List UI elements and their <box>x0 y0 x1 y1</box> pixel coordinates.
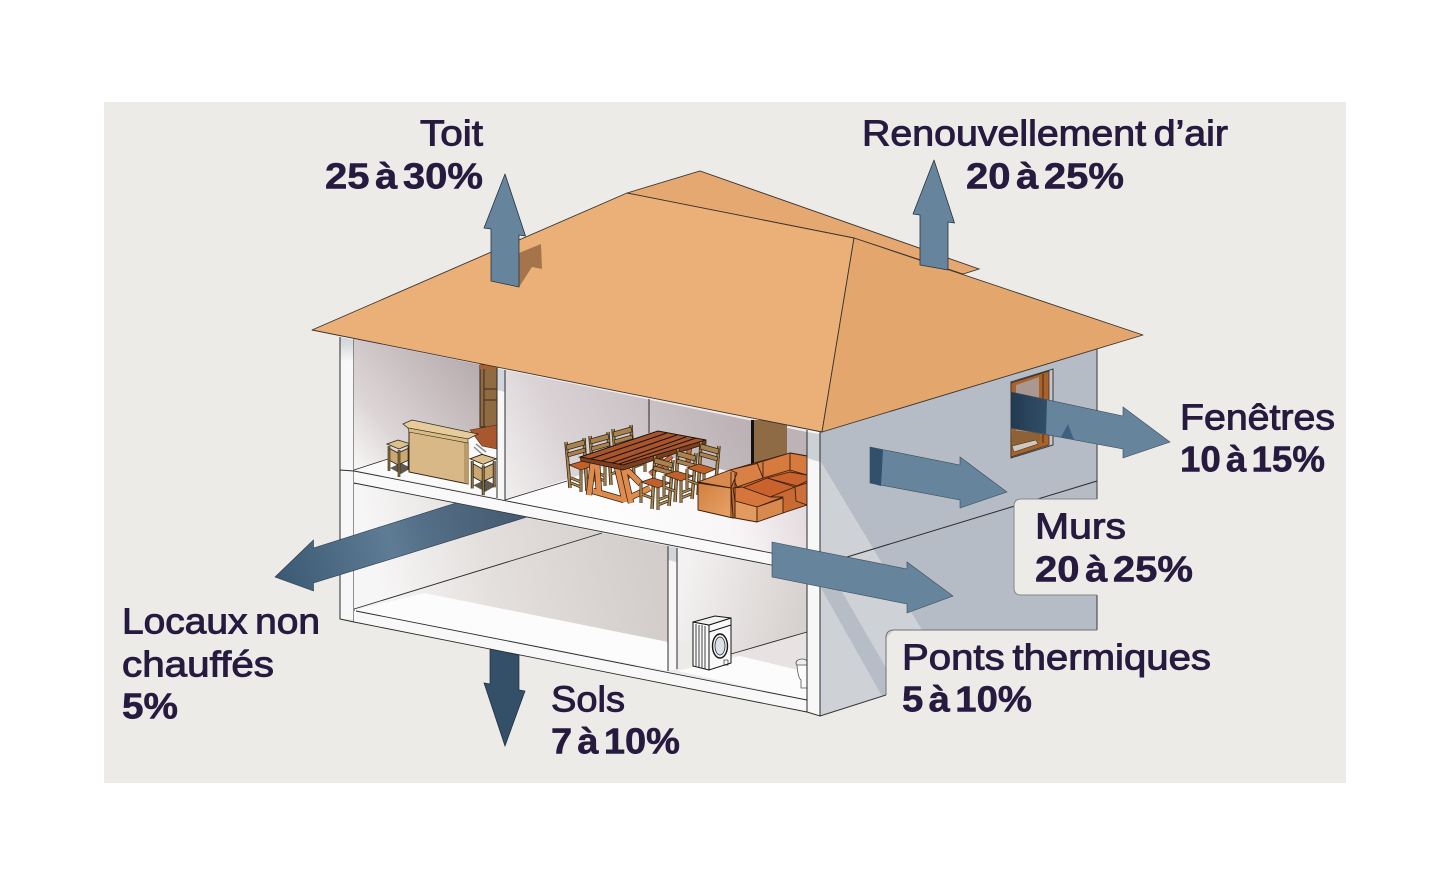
upper left room <box>354 339 497 498</box>
bar counter <box>403 420 478 484</box>
arrow: renouvellement d'air <box>913 160 954 270</box>
chairs back row <box>566 425 645 492</box>
upper partition wall <box>497 368 505 500</box>
label: sols <box>551 678 680 762</box>
arrow: sols <box>484 649 525 746</box>
roof back slope <box>627 171 979 274</box>
arrow: toit <box>484 174 526 287</box>
house <box>312 171 1143 716</box>
bed <box>470 425 497 449</box>
label: sols: 7 à 10% <box>551 720 680 762</box>
exterior right wall <box>820 349 1097 716</box>
ground floor slab <box>354 611 807 712</box>
label: ponts thermiques <box>902 636 1211 720</box>
label: ponts thermiques: Ponts thermiques <box>902 636 1211 678</box>
lower left room <box>354 484 668 671</box>
label: ponts thermiques: 5 à 10% <box>902 678 1032 720</box>
right corner wall section <box>807 430 820 716</box>
label: murs: 20 à 25% <box>1035 548 1193 590</box>
background panel <box>104 102 1346 783</box>
arrow: fenetres <box>1011 392 1170 458</box>
label: toit: 25 à 30% <box>325 156 483 196</box>
label: fenetres: 10 à 15% <box>1180 438 1325 480</box>
stool right <box>470 454 496 495</box>
washing machine <box>693 616 731 670</box>
callout notch: Murs <box>1014 499 1100 595</box>
label: locaux non chauffes: chauffés <box>122 644 274 684</box>
arrow: murs <box>870 447 1007 508</box>
roof <box>312 193 1143 432</box>
label: renouvellement d'air: 20 à 25% <box>966 156 1124 196</box>
label: locaux non chauffes: 5% <box>122 686 178 726</box>
label: renouvellement d'air: Renouvellement d’air <box>862 112 1228 154</box>
label: locaux non chauffes <box>122 600 320 726</box>
label: fenetres <box>1180 396 1335 480</box>
label: toit: Toit <box>420 112 483 154</box>
chairs front row <box>641 442 719 510</box>
arrow: locaux non chauffes <box>275 503 527 591</box>
corner sofa <box>698 453 807 522</box>
dining table <box>580 431 706 503</box>
stool left <box>387 440 411 477</box>
lower right room <box>677 548 808 700</box>
arrow: ponts thermiques <box>772 542 953 613</box>
window <box>1011 369 1053 458</box>
label: sols: Sols <box>551 678 625 720</box>
label: locaux non chauffes: Locaux non <box>122 600 320 642</box>
roof right slope <box>822 238 1143 432</box>
roof front slope <box>312 193 854 432</box>
label: toit <box>325 112 483 196</box>
toilet <box>796 659 808 688</box>
back door <box>751 420 787 466</box>
lower partition wall <box>668 546 677 671</box>
upper right room <box>505 370 807 560</box>
upper floor slab <box>354 471 807 572</box>
left outer wall section <box>340 337 354 622</box>
label: fenetres: Fenêtres <box>1180 396 1335 438</box>
label: murs: Murs <box>1035 506 1126 546</box>
door in back room <box>480 365 497 427</box>
arrow shadow on roof <box>519 244 542 287</box>
label: murs <box>1035 506 1193 590</box>
label: renouvellement d'air <box>862 112 1228 196</box>
